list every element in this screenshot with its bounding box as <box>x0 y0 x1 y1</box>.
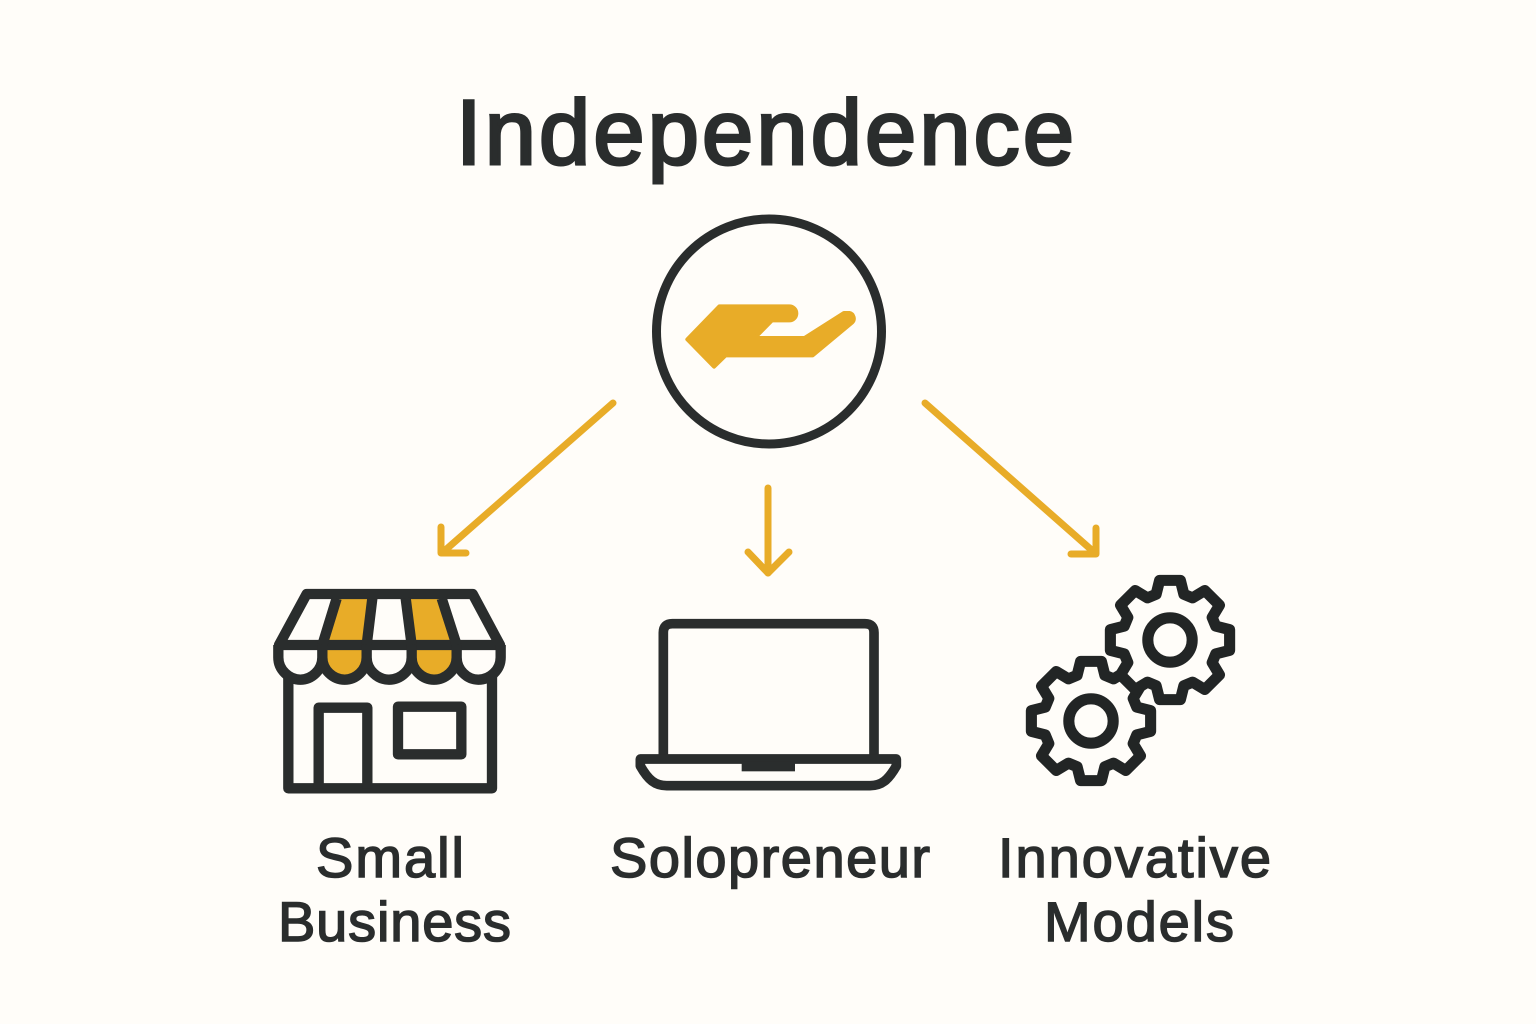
label: small business: Business <box>278 890 511 953</box>
door <box>319 708 367 788</box>
upper gear <box>1110 580 1230 700</box>
arrow: to innovative models <box>925 403 1096 554</box>
label: innovative models: Models <box>1044 890 1234 953</box>
label: small business: Small <box>316 826 464 889</box>
circle outline <box>656 219 882 444</box>
label: solopreneur: Solopreneur <box>610 826 930 889</box>
icon: laptop <box>640 624 896 786</box>
label: small business <box>278 826 511 953</box>
icon: gears <box>1031 580 1230 781</box>
awning scallops <box>278 645 501 680</box>
shop body <box>288 676 492 788</box>
icon: storefront <box>278 594 501 788</box>
laptop screen <box>663 624 874 759</box>
lower gear <box>1031 661 1151 781</box>
arrow: to solopreneur <box>748 488 789 573</box>
icon: open hand <box>687 306 854 367</box>
awning yellow stripes <box>326 598 453 677</box>
central circle with hand icon <box>656 219 882 444</box>
laptop notch <box>742 762 795 771</box>
laptop base <box>640 759 896 786</box>
awning roof <box>279 594 500 645</box>
title: Independence <box>456 82 1074 184</box>
window <box>398 707 461 754</box>
label: innovative models <box>998 826 1271 953</box>
label: innovative models: Innovative <box>998 826 1271 889</box>
arrow: to small business <box>441 403 613 553</box>
awning dividers <box>322 598 457 645</box>
